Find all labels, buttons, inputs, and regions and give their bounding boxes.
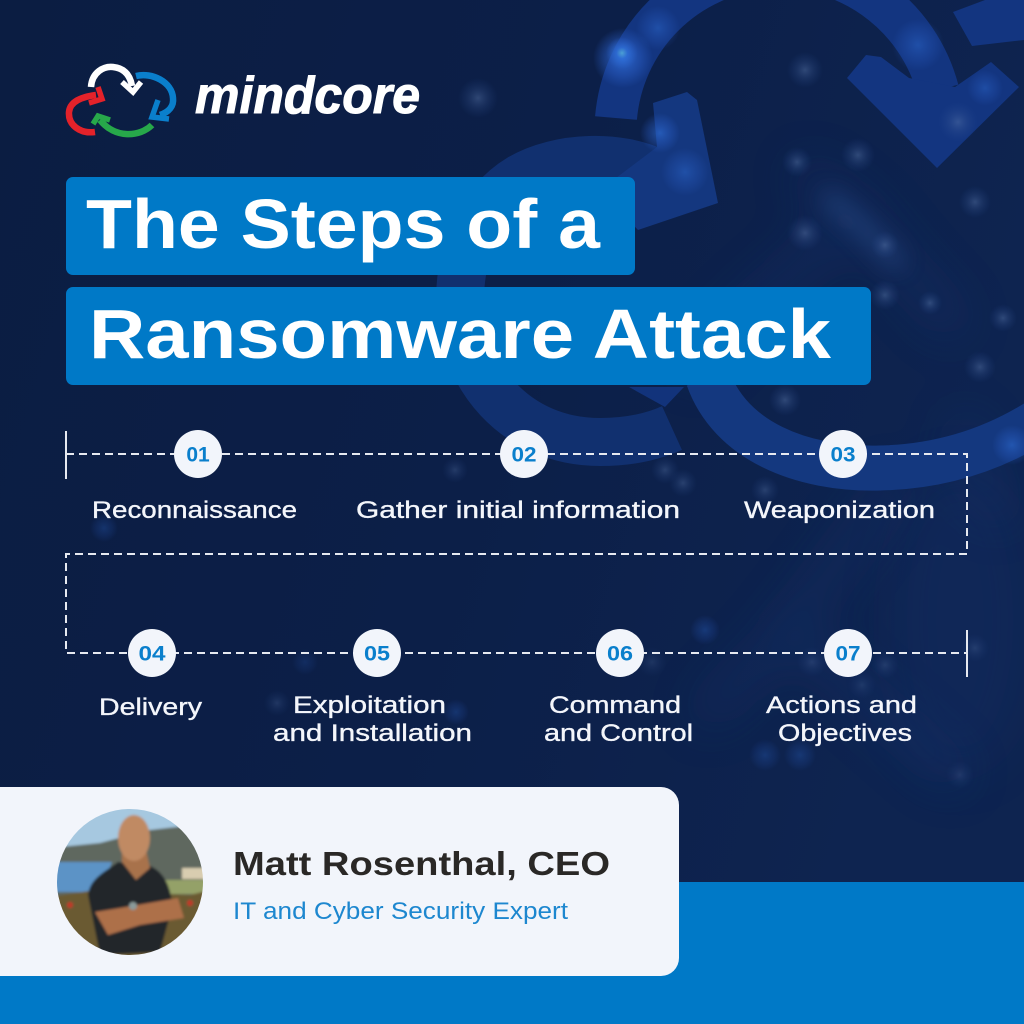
step 05: 05 bbox=[364, 642, 390, 666]
role: IT and Cyber Security Expert bbox=[233, 898, 568, 925]
title line 2 bbox=[66, 287, 871, 385]
icon: four-colour cloud arrows bbox=[69, 67, 173, 134]
step 03: 03 bbox=[830, 444, 856, 466]
portrait photo bbox=[57, 809, 203, 955]
arrow: left arc bbox=[460, 92, 718, 442]
step 01: Reconnaissance bbox=[92, 497, 297, 524]
step 04: Delivery bbox=[99, 694, 202, 721]
arrow: top arc bbox=[593, 0, 1019, 168]
step 05: Exploitation bbox=[293, 692, 446, 719]
logo: mindcore bbox=[69, 67, 420, 134]
step 02: 02 bbox=[512, 444, 536, 466]
recycling arrows graphic bbox=[460, 0, 1024, 468]
timeline path bbox=[66, 431, 967, 677]
step 04 bbox=[99, 629, 202, 721]
title bbox=[66, 177, 871, 385]
logo wordmark: mindcore bbox=[195, 67, 420, 125]
title line 1: The Steps of a bbox=[86, 185, 601, 263]
step 03: Weaponization bbox=[744, 497, 935, 524]
step 04: 04 bbox=[138, 642, 166, 666]
arrow: top right fragment bbox=[953, 0, 1024, 46]
step 07: Objectives bbox=[778, 720, 912, 747]
step 02 bbox=[356, 430, 680, 524]
step 07: 07 bbox=[836, 642, 860, 666]
step 01: 01 bbox=[186, 444, 210, 466]
step 01 bbox=[92, 430, 297, 524]
step 02: Gather initial information bbox=[356, 497, 680, 524]
step 05 bbox=[273, 629, 472, 747]
step 06 bbox=[544, 629, 693, 747]
title line 2: Ransomware Attack bbox=[89, 295, 831, 373]
panel: speaker card bbox=[0, 787, 679, 976]
footer band bbox=[0, 882, 1024, 1024]
title line 1 bbox=[66, 177, 635, 275]
step 06: Command bbox=[549, 692, 681, 719]
name: Matt Rosenthal, CEO bbox=[233, 845, 610, 882]
step 06: and Control bbox=[544, 720, 693, 747]
step 03 bbox=[744, 430, 935, 524]
step 07 bbox=[766, 629, 917, 747]
step 07: Actions and bbox=[766, 692, 917, 719]
step 06: 06 bbox=[607, 642, 633, 666]
step 05: and Installation bbox=[273, 720, 472, 747]
arrow: bottom right arc bbox=[708, 378, 1024, 468]
